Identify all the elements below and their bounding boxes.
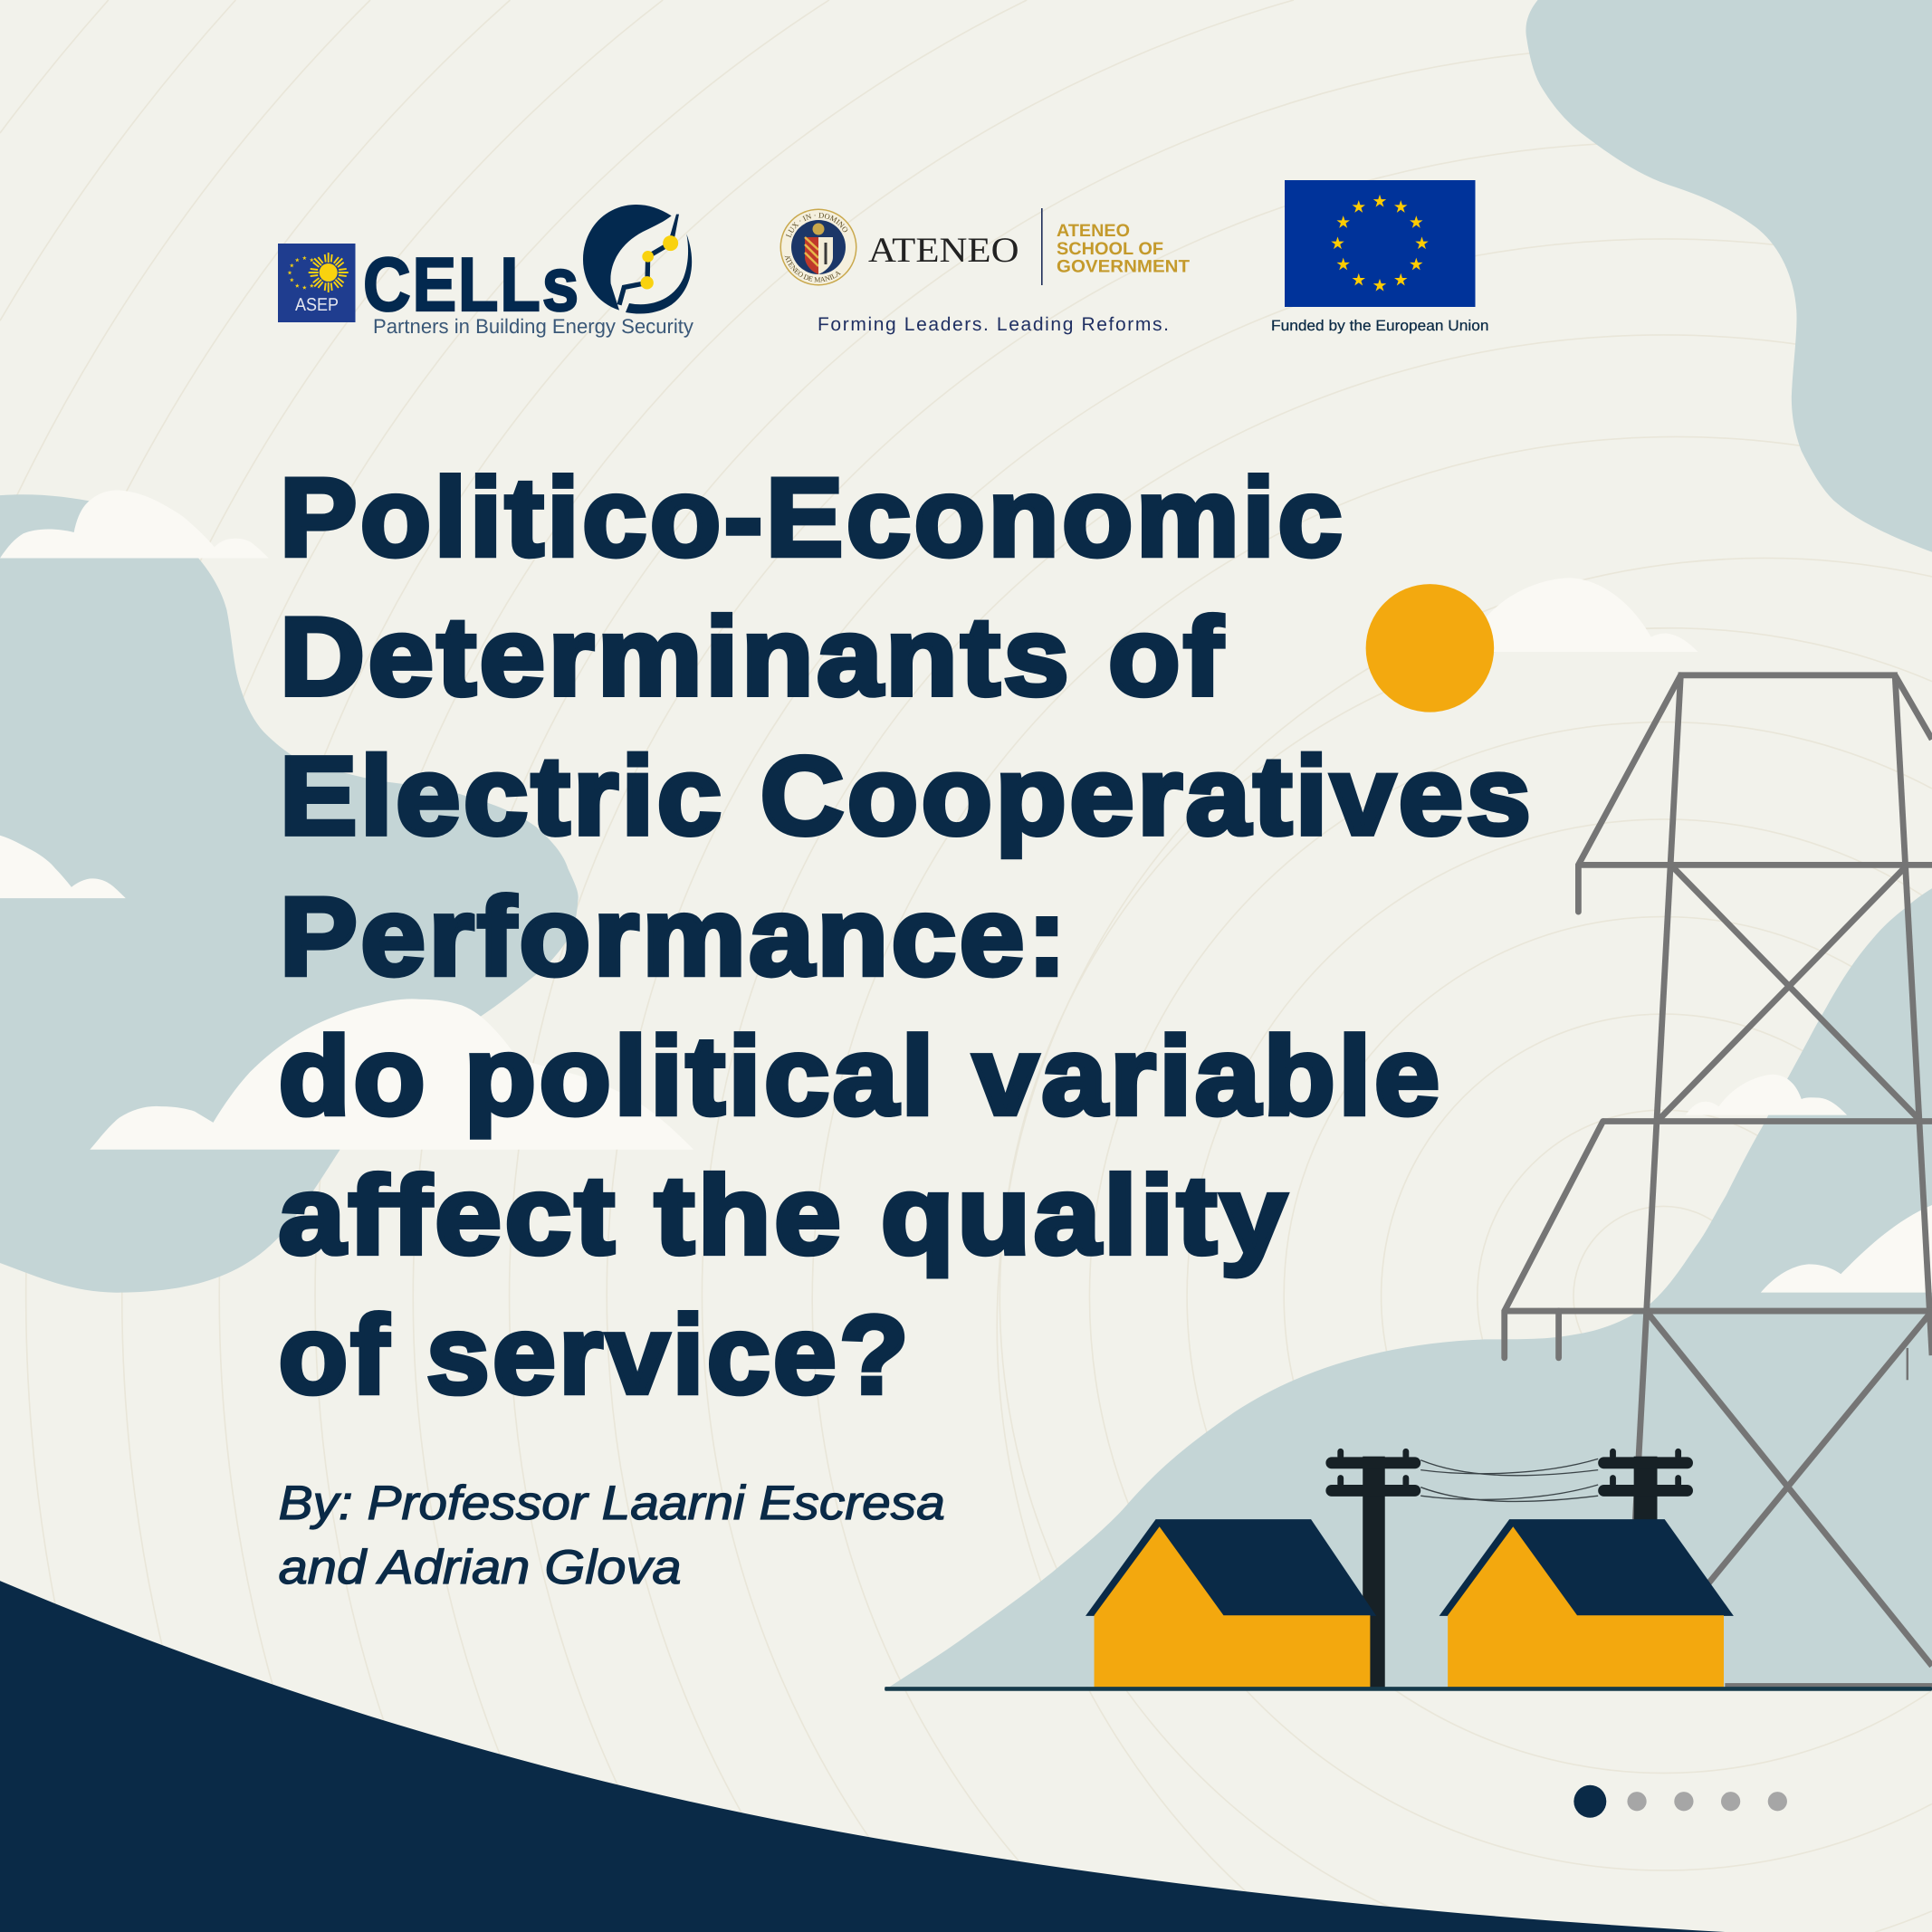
icon: ASEP badge: ASEP bbox=[295, 295, 339, 315]
school name: SCHOOL OF bbox=[1057, 239, 1163, 259]
authors: and Adrian Glova bbox=[279, 1542, 682, 1594]
house: left bbox=[1086, 1519, 1376, 1688]
title: Determinants of bbox=[280, 596, 1226, 720]
cloud: behind sun bbox=[1467, 578, 1698, 652]
authors: By: Professor Laarni Escresa bbox=[279, 1478, 945, 1530]
blob: top right bbox=[1526, 0, 1932, 552]
CELLs tagline: Partners in Building Energy Security bbox=[373, 315, 694, 338]
tower base bar bbox=[1725, 1683, 1932, 1688]
logo: ASEP / CELLs bbox=[278, 205, 694, 338]
utility pole: right bbox=[1598, 1449, 1693, 1530]
ground line bbox=[885, 1687, 1932, 1691]
logo: EU flag bbox=[1271, 180, 1488, 334]
icon: CELLs leaf emblem bbox=[583, 205, 692, 314]
school name bbox=[1057, 221, 1190, 277]
pagination dots bbox=[1573, 1785, 1787, 1818]
divider bbox=[1041, 208, 1043, 285]
blob: left bbox=[0, 494, 579, 1293]
sun bbox=[1366, 584, 1494, 713]
title: Electric Cooperatives bbox=[280, 735, 1534, 858]
blob: bottom right hill bbox=[890, 888, 1932, 1687]
school name: ATENEO bbox=[1057, 221, 1130, 241]
icon: Ateneo seal: ATENEO DE MANILA bbox=[784, 255, 841, 282]
title: do political variable bbox=[279, 1016, 1443, 1139]
power lines bbox=[1420, 1459, 1598, 1501]
Ateneo tagline: Forming Leaders. Leading Reforms. bbox=[818, 314, 1169, 335]
icon: Ateneo seal bbox=[780, 208, 856, 286]
CELLs wordmark: CELLs bbox=[363, 242, 580, 327]
transmission tower bbox=[1505, 675, 1932, 1686]
icon: Ateneo seal: LUX · IN · DOMINO bbox=[786, 212, 847, 238]
school name: GOVERNMENT bbox=[1057, 257, 1190, 277]
cloud: behind tower bbox=[1686, 1075, 1847, 1115]
title: affect the quality bbox=[279, 1155, 1290, 1278]
icon: ASEP badge bbox=[278, 244, 355, 322]
title: Performance: bbox=[280, 876, 1069, 999]
cloud: left edge bbox=[0, 836, 126, 898]
flag bbox=[1285, 180, 1475, 307]
navy wave bbox=[0, 1581, 1725, 1932]
cloud: top left bbox=[0, 490, 269, 559]
title: Politico-Economic bbox=[280, 457, 1345, 580]
cloud: large bbox=[90, 999, 693, 1150]
logo: Ateneo School of Government bbox=[780, 208, 1190, 335]
house: right bbox=[1439, 1519, 1734, 1688]
title: of service? bbox=[279, 1295, 912, 1418]
cloud: lower right bbox=[1761, 1205, 1932, 1293]
utility pole: left bbox=[1325, 1449, 1420, 1688]
caption: Funded by the European Union bbox=[1271, 318, 1488, 334]
ATENEO wordmark: ATENEO bbox=[868, 231, 1019, 270]
authors bbox=[279, 1478, 945, 1594]
title bbox=[279, 457, 1534, 1418]
